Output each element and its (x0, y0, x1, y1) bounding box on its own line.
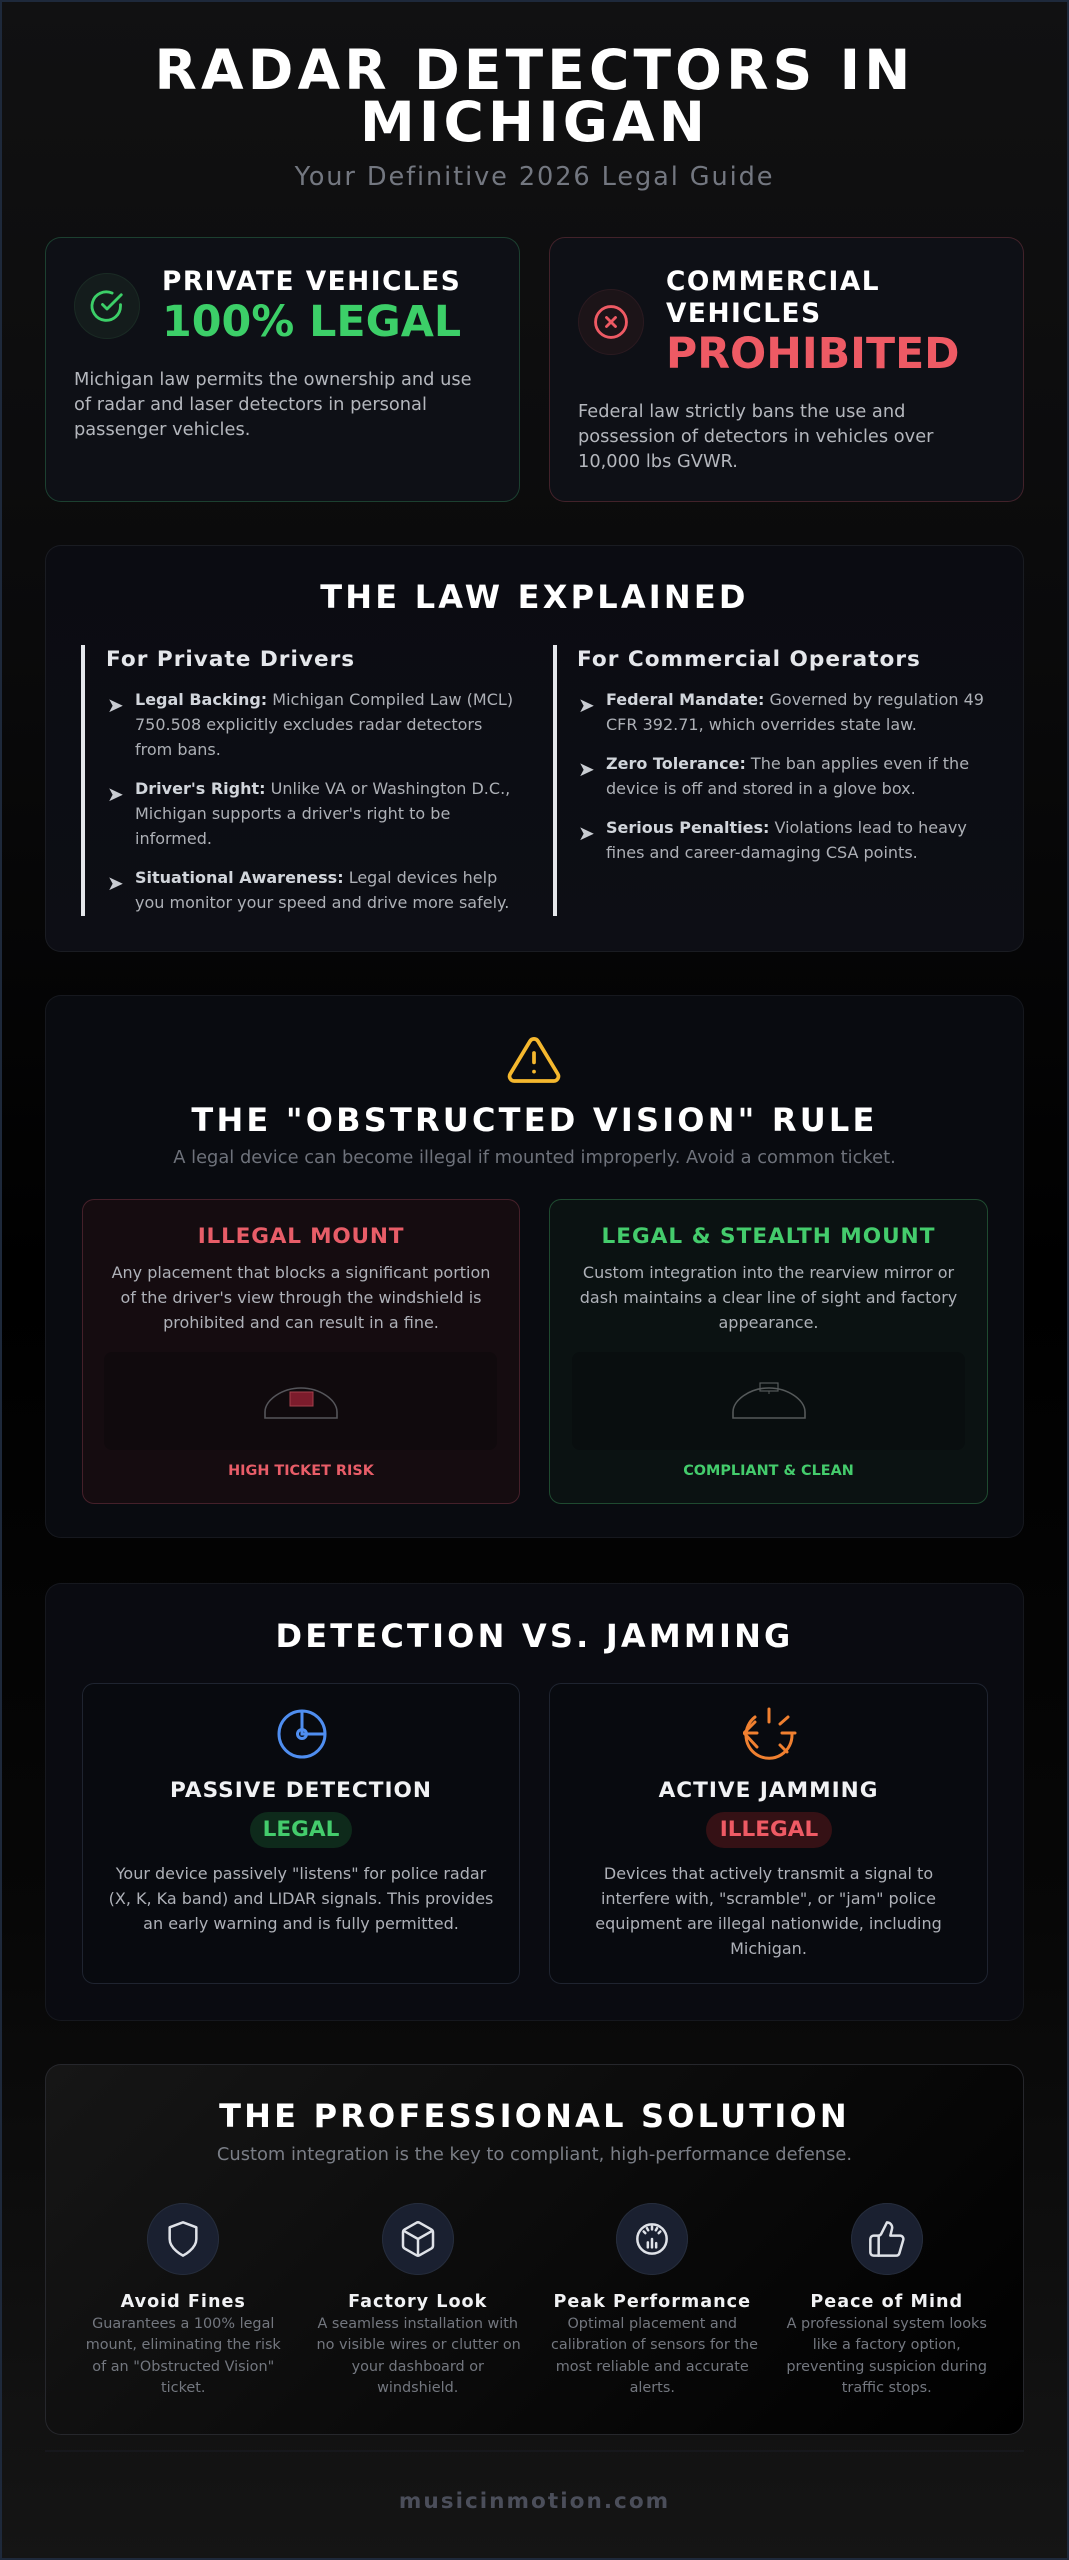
badge: illegal (706, 1812, 832, 1848)
description: Guarantees a 100% legal (92, 2316, 274, 2332)
description: (X, K, Ka band) and LIDAR signals. This provides (109, 1889, 493, 1908)
list item: driver's right (107, 779, 510, 848)
description: of radar and laser detectors in personal (74, 394, 427, 415)
arrow: ➤ (107, 782, 124, 806)
text: you monitor your speed and drive more safely. (135, 893, 509, 912)
description: Devices that actively transmit a signal to (604, 1864, 933, 1883)
description: passenger vehicles. (74, 419, 250, 440)
panel: passive detection (82, 1683, 520, 1984)
description: ticket. (161, 2380, 205, 2396)
illustration: obstructing mount (104, 1352, 497, 1450)
heading: DETECTION VS. JAMMING (275, 1617, 794, 1655)
description (580, 1263, 957, 1332)
list item: serious penalties (578, 818, 967, 862)
description (86, 2316, 281, 2396)
list item: legal backing (107, 690, 513, 759)
description: appearance. (718, 1313, 818, 1332)
icon: check circle (74, 273, 140, 339)
description (74, 369, 472, 440)
subheading: Custom integration is the key to compliant, high-performance defense. (217, 2144, 852, 2165)
description (551, 2316, 758, 2396)
panel: obstructed vision rule (45, 995, 1024, 1538)
description: Your device passively "listens" for police radar (116, 1864, 486, 1883)
description: A professional system looks (787, 2316, 987, 2332)
label: compliant and clean: COMPLIANT & CLEAN (683, 1463, 854, 1479)
subheading: A legal device can become illegal if mounted improperly. Avoid a common ticket. (173, 1147, 896, 1168)
title: MICHIGAN (360, 90, 709, 154)
subtitle: Your Definitive 2026 Legal Guide (295, 162, 774, 192)
panel: private vehicles (45, 237, 520, 502)
heading: commercial vehicles: VEHICLES (666, 298, 822, 328)
description: an early warning and is fully permitted. (143, 1914, 459, 1933)
text: Legal Backing: Michigan Compiled Law (MCL) (135, 690, 513, 709)
text: informed. (135, 829, 212, 848)
icon: jamming signal (743, 1708, 796, 1760)
text: Michigan supports a driver's right to be (135, 804, 450, 823)
column heading: commercial operators: For Commercial Operators (577, 647, 921, 672)
description: Custom integration into the rearview mirror or (583, 1263, 954, 1282)
label: high ticket risk: HIGH TICKET RISK (228, 1463, 374, 1479)
description: possession of detectors in vehicles over (578, 426, 933, 447)
benefit: factory look (316, 2203, 521, 2396)
description: Michigan. (730, 1939, 807, 1958)
text (606, 690, 984, 734)
title: Peace of Mind (810, 2292, 963, 2312)
text (135, 868, 509, 912)
description: of the driver's view through the windshield is (120, 1288, 482, 1307)
title (155, 38, 914, 154)
footer: website: musicinmotion.com (399, 2489, 670, 2514)
panel: the professional solution (45, 2064, 1024, 2435)
badge: legal: LEGAL (263, 1817, 339, 1842)
description: interfere with, "scramble", or "jam" police (601, 1889, 936, 1908)
badge: illegal: ILLEGAL (720, 1817, 818, 1842)
description (112, 1263, 490, 1332)
panel: detection vs jamming (45, 1583, 1024, 2021)
icon: radar (278, 1710, 326, 1758)
panel: illegal mount (82, 1199, 520, 1504)
description: of an "Obstructed Vision" (92, 2358, 274, 2374)
text: Federal Mandate: Governed by regulation 49 (606, 690, 984, 709)
arrow: ➤ (107, 693, 124, 717)
text (606, 818, 967, 862)
panel: the law explained (45, 545, 1024, 952)
description: Federal law strictly bans the use and (578, 401, 905, 422)
description: prohibited and can result in a fine. (163, 1313, 439, 1332)
header (155, 38, 914, 192)
heading: THE "OBSTRUCTED VISION" RULE (191, 1101, 878, 1139)
list item: federal mandate (578, 690, 984, 734)
icon: gauge (616, 2203, 688, 2275)
text: fines and career-damaging CSA points. (606, 843, 918, 862)
title: Peak Performance (553, 2292, 751, 2312)
text (606, 754, 969, 798)
description: your dashboard or (352, 2358, 484, 2374)
description: dash maintains a clear line of sight and factory (580, 1288, 957, 1307)
description: Any placement that blocks a significant portion (112, 1263, 490, 1282)
text: Zero Tolerance: The ban applies even if the (606, 754, 969, 773)
description: traffic stops. (842, 2380, 932, 2396)
benefit: avoid fines (86, 2203, 281, 2396)
panel: commercial vehicles (549, 237, 1024, 502)
panel: legal and stealth mount (549, 1199, 988, 1504)
description: like a factory option, (813, 2337, 961, 2353)
text: Serious Penalties: Violations lead to heavy (606, 818, 967, 837)
text: Situational Awareness: Legal devices help (135, 868, 497, 887)
description: equipment are illegal nationwide, including (595, 1914, 942, 1933)
description: Optimal placement and (567, 2316, 737, 2332)
description: 10,000 lbs GVWR. (578, 451, 738, 472)
benefit: peace of mind (786, 2203, 987, 2396)
heading: commercial vehicles: COMMERCIAL (666, 266, 880, 296)
description: Michigan law permits the ownership and use (74, 369, 472, 390)
description: preventing suspicion during (786, 2358, 987, 2374)
description: no visible wires or clutter on (316, 2337, 521, 2353)
description (316, 2316, 521, 2396)
heading: THE PROFESSIONAL SOLUTION (219, 2097, 850, 2135)
text: Driver's Right: Unlike VA or Washington D.C., (135, 779, 510, 798)
description (786, 2316, 987, 2396)
description: windshield. (377, 2380, 458, 2396)
heading: PASSIVE DETECTION (170, 1778, 432, 1803)
text: device is off and stored in a glove box. (606, 779, 916, 798)
description: most reliable and accurate (556, 2358, 749, 2374)
icon: thumbs up (851, 2203, 923, 2275)
title: Factory Look (348, 2292, 487, 2312)
description (595, 1864, 942, 1958)
badge: legal (250, 1812, 352, 1848)
title: Avoid Fines (121, 2292, 246, 2312)
heading: illegal mount: ILLEGAL MOUNT (198, 1224, 404, 1249)
text (135, 779, 510, 848)
heading: legal and stealth mount: LEGAL & STEALTH MOUNT (601, 1224, 936, 1249)
icon: shield (147, 2203, 219, 2275)
column heading: private drivers: For Private Drivers (106, 647, 355, 672)
heading: ACTIVE JAMMING (659, 1778, 878, 1803)
arrow: ➤ (578, 757, 595, 781)
panel: active jamming (549, 1683, 988, 1984)
icon: x circle (578, 289, 644, 355)
description: calibration of sensors for the (551, 2337, 758, 2353)
status: prohibited: PROHIBITED (666, 329, 960, 379)
title: RADAR DETECTORS IN (155, 38, 914, 102)
text (135, 690, 513, 759)
icon: box (382, 2203, 454, 2275)
description: A seamless installation with (317, 2316, 518, 2332)
list item: situational awareness (107, 868, 509, 912)
list item: zero tolerance (578, 754, 969, 798)
status: 100% legal: 100% LEGAL (162, 297, 461, 347)
arrow: ➤ (107, 871, 124, 895)
heading: commercial vehicles (666, 266, 880, 328)
heading: THE LAW EXPLAINED (320, 578, 749, 616)
heading: private vehicles: PRIVATE VEHICLES (162, 266, 461, 296)
arrow: ➤ (578, 821, 595, 845)
text: CFR 392.71, which overrides state law. (606, 715, 917, 734)
arrow: ➤ (578, 693, 595, 717)
benefit: peak performance (551, 2203, 758, 2396)
illustration: stealth mount (572, 1352, 965, 1450)
description: alerts. (630, 2380, 675, 2396)
description (109, 1864, 493, 1933)
text: 750.508 explicitly excludes radar detectors (135, 715, 482, 734)
description: mount, eliminating the risk (86, 2337, 281, 2353)
description (578, 401, 934, 472)
text: from bans. (135, 740, 221, 759)
icon: warning triangle (508, 1037, 560, 1083)
